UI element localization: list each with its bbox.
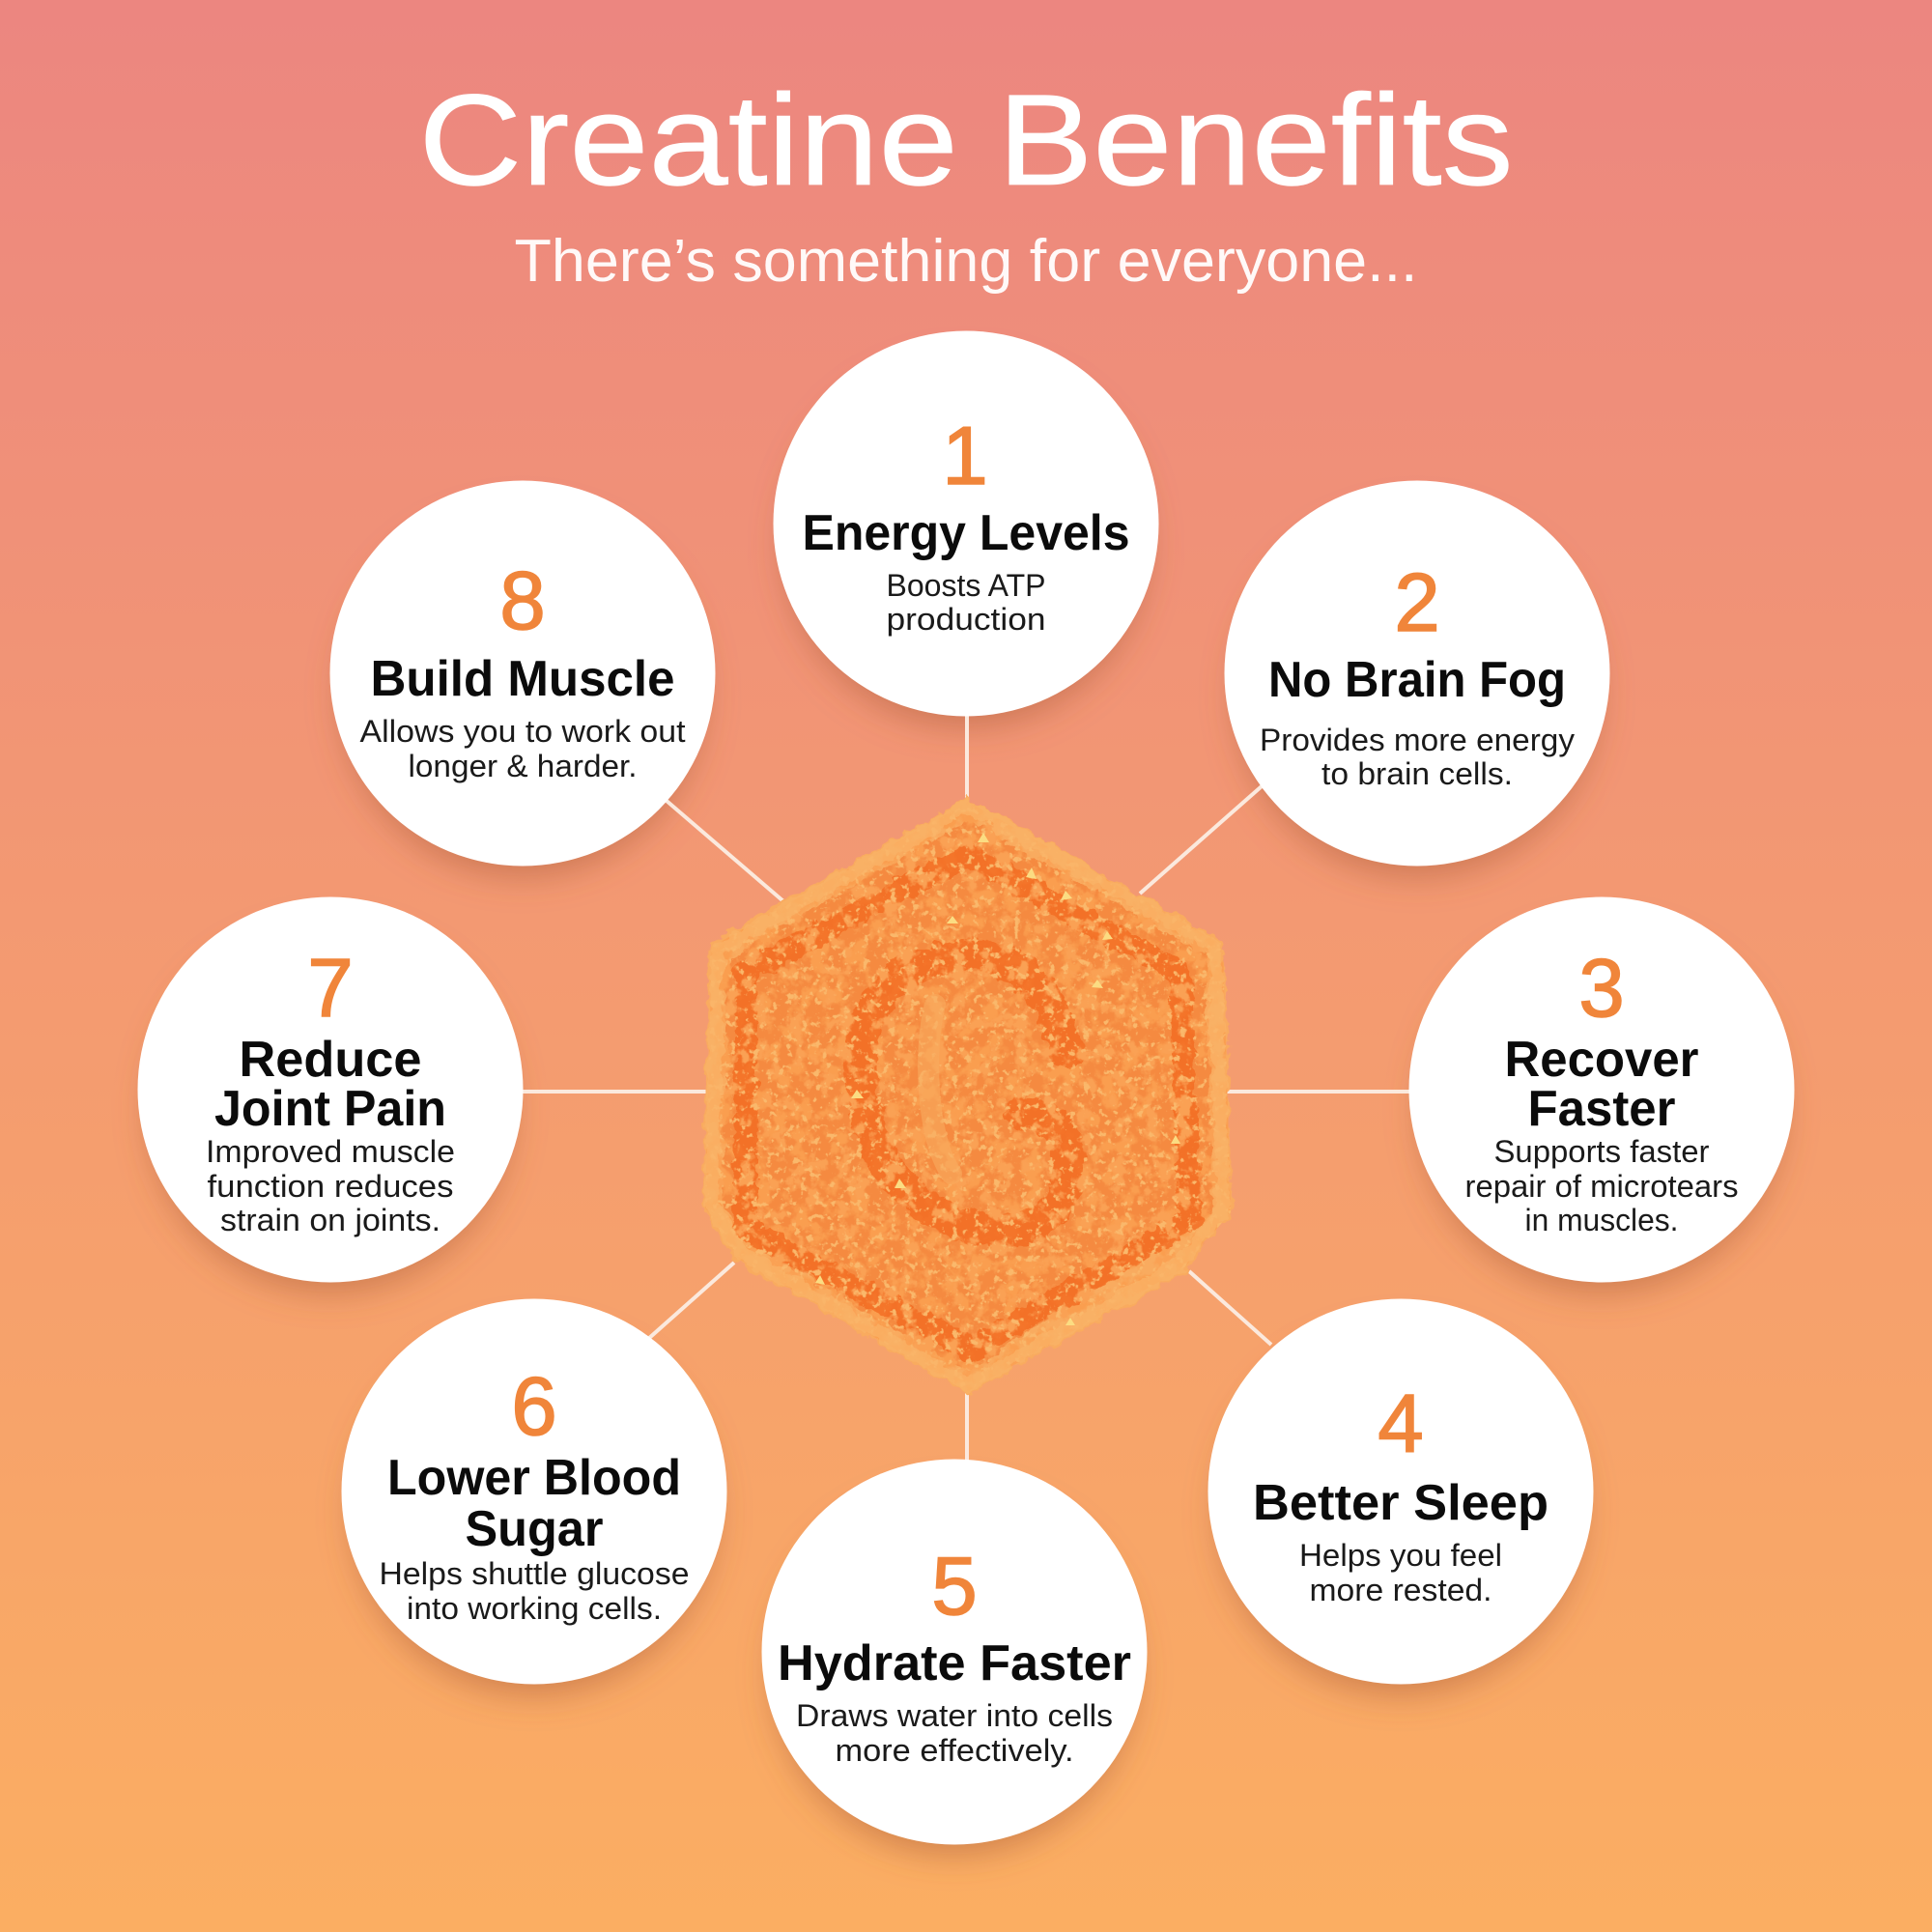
fine sugar grain xyxy=(705,802,1231,1391)
circle 3: Recover Faster: Recover xyxy=(1505,1032,1698,1088)
circle 2: No Brain Fog: to brain cells. xyxy=(1321,756,1513,791)
circle 1: Energy Levels: production xyxy=(887,602,1045,637)
circle 5: Hydrate Faster: Draws water into cells xyxy=(796,1698,1113,1733)
circle 7: Reduce Joint Pain: function reduces xyxy=(207,1169,454,1204)
circle 1: Energy Levels: Energy Levels xyxy=(802,505,1130,561)
grooves and C emblem xyxy=(746,855,1190,1350)
circle 3: Recover Faster: 3 xyxy=(1578,943,1625,1035)
circle 4: Better Sleep: 4 xyxy=(1378,1378,1424,1470)
circle 7: Reduce Joint Pain xyxy=(137,896,524,1283)
circle 4: Better Sleep xyxy=(1208,1298,1594,1685)
circle 7: Reduce Joint Pain: 7 xyxy=(307,943,354,1035)
circle 6: Lower Blood Sugar: Sugar xyxy=(466,1501,603,1557)
circle 3: Recover Faster: Faster xyxy=(1528,1081,1675,1137)
circle 6: Lower Blood Sugar: into working cells. xyxy=(407,1591,662,1626)
mottled sugar texture xyxy=(705,802,1231,1391)
C letter highlight xyxy=(928,1005,952,1174)
central creatine gummy hexagon xyxy=(702,797,1233,1395)
circle 4: Better Sleep: more rested. xyxy=(1310,1573,1492,1607)
circle 7: Reduce Joint Pain: strain on joints. xyxy=(220,1203,440,1237)
sugar crystals xyxy=(815,833,1180,1325)
gummy base xyxy=(702,797,1233,1395)
circle 2: No Brain Fog: Provides more energy xyxy=(1260,723,1575,757)
circle 2: No Brain Fog: 2 xyxy=(1394,557,1440,649)
circle 7: Reduce Joint Pain: Joint Pain xyxy=(214,1081,446,1137)
circle drop shadows xyxy=(149,363,1783,1855)
circle 6: Lower Blood Sugar: 6 xyxy=(511,1361,557,1453)
circle 4: Better Sleep: Better Sleep xyxy=(1253,1475,1548,1531)
circle 6: Lower Blood Sugar: Helps shuttle glucose xyxy=(379,1556,690,1591)
title: Creatine Benefits xyxy=(419,69,1513,213)
subtitle: There’s something for everyone... xyxy=(514,228,1418,295)
circle 5: Hydrate Faster: 5 xyxy=(931,1541,978,1633)
circle 8: Build Muscle: 8 xyxy=(499,555,546,647)
circle 3: Recover Faster: Supports faster xyxy=(1493,1134,1710,1169)
circle 5: Hydrate Faster: more effectively. xyxy=(835,1733,1074,1768)
circle 6: Lower Blood Sugar xyxy=(342,1298,726,1685)
circle 6: Lower Blood Sugar: Lower Blood xyxy=(387,1450,681,1506)
circle 1: Energy Levels: 1 xyxy=(942,411,988,502)
circle 7: Reduce Joint Pain: Improved muscle xyxy=(206,1134,455,1169)
circle 8: Build Muscle: longer & harder. xyxy=(408,749,638,783)
circle 1: Energy Levels: Boosts ATP xyxy=(887,568,1045,603)
sugar rim xyxy=(711,806,1223,1385)
circle 4: Better Sleep: Helps you feel xyxy=(1299,1538,1502,1573)
circle 7: Reduce Joint Pain: Reduce xyxy=(240,1032,421,1088)
circle 2: No Brain Fog: No Brain Fog xyxy=(1268,652,1566,708)
circle 3: Recover Faster xyxy=(1408,896,1795,1283)
circle 8: Build Muscle: Build Muscle xyxy=(371,651,674,707)
circle 1: Energy Levels xyxy=(773,330,1159,717)
circle 5: Hydrate Faster: Hydrate Faster xyxy=(778,1635,1131,1691)
circle 5: Hydrate Faster xyxy=(761,1459,1148,1845)
connector lines xyxy=(522,715,1410,1463)
circle 2: No Brain Fog xyxy=(1225,481,1609,866)
circle 3: Recover Faster: repair of microtears xyxy=(1464,1169,1739,1204)
sugar crust over grooves xyxy=(705,802,1231,1391)
circle 8: Build Muscle xyxy=(330,481,715,866)
circle 3: Recover Faster: in muscles. xyxy=(1524,1203,1679,1237)
circle 8: Build Muscle: Allows you to work out xyxy=(359,714,686,749)
